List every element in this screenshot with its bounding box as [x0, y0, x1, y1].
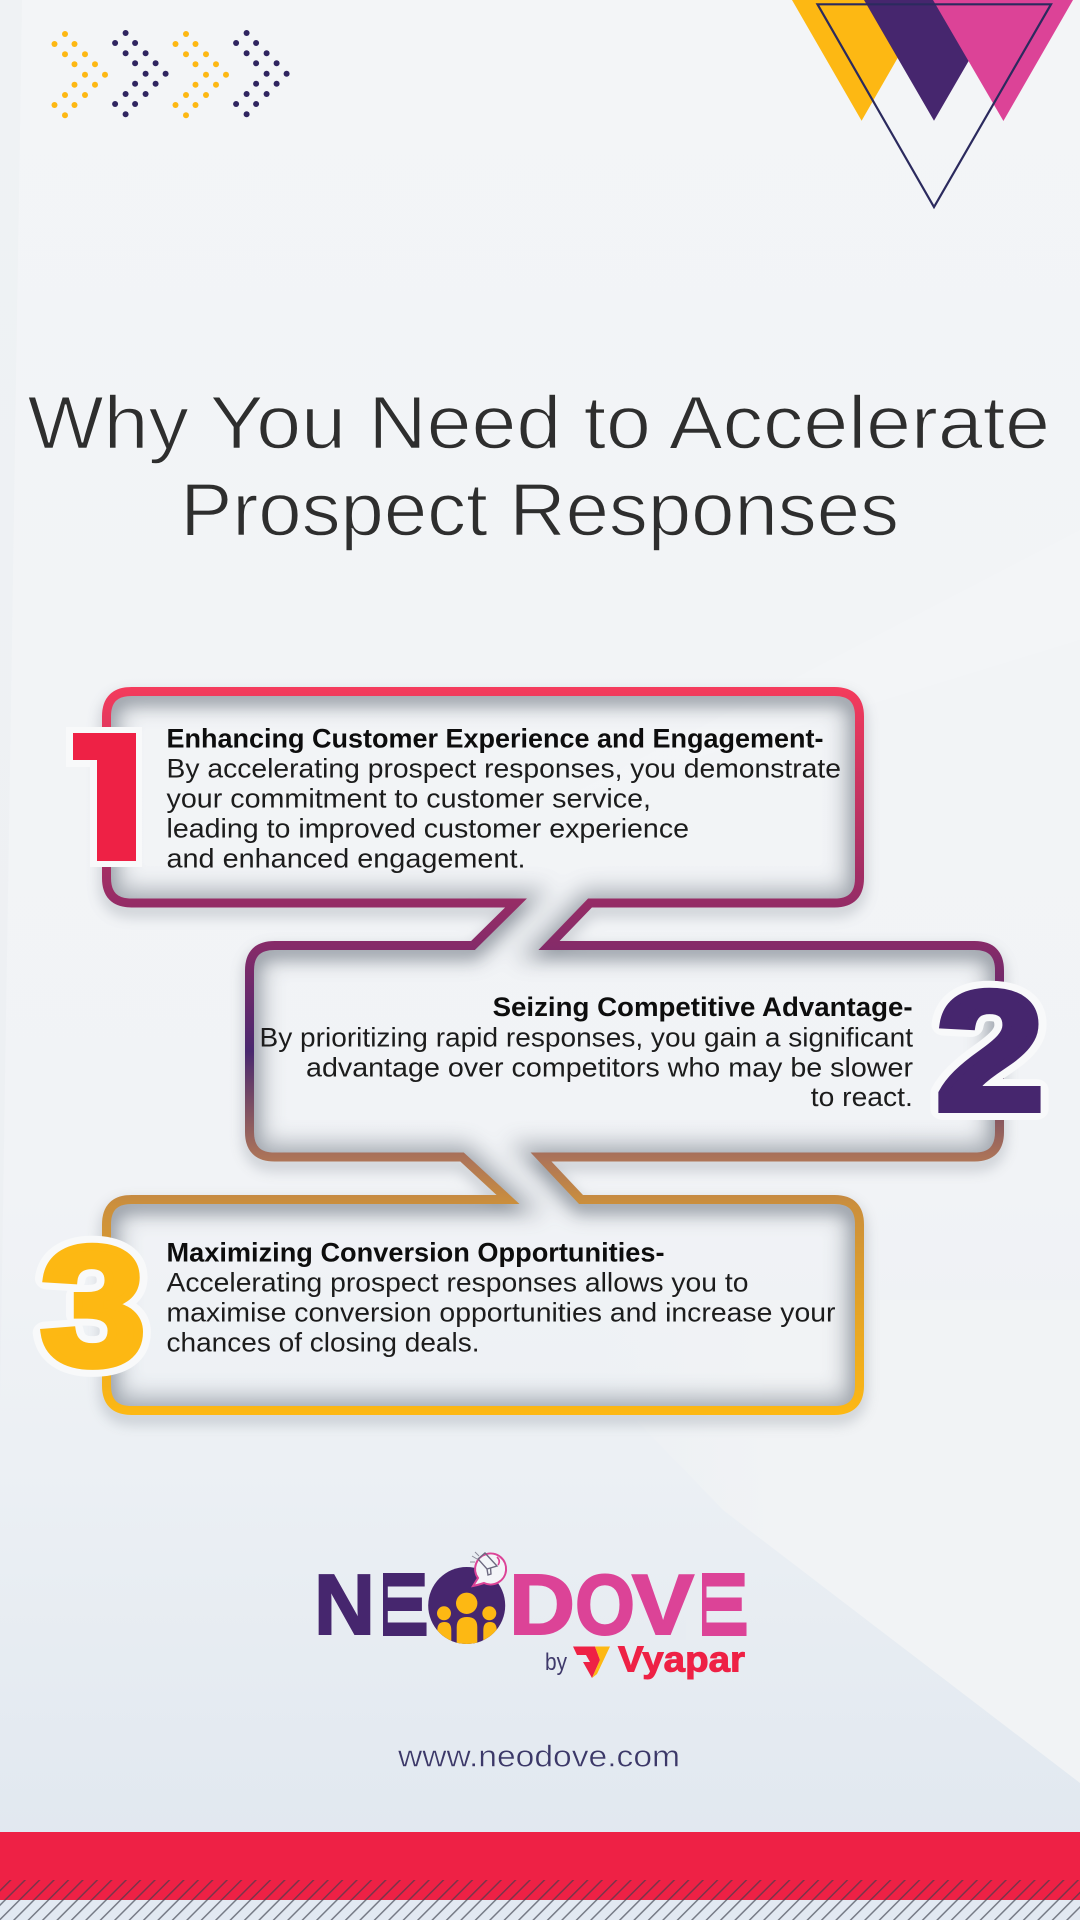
logo wordmark: V: [632, 1558, 694, 1653]
NeoDove logo: [314, 1552, 748, 1680]
number 3: 3: [41, 1212, 145, 1400]
panel 2 text: Seizing Competitive Advantage-: [493, 992, 913, 1022]
logo wordmark: N: [314, 1558, 375, 1653]
number 1: [73, 727, 142, 867]
panel 3 text: maximise conversion opportunities and increase your: [166, 1298, 836, 1328]
logo wordmark: D: [509, 1558, 575, 1653]
panel 1 text: and enhanced engagement.: [166, 844, 526, 874]
dotted chevron arrows: [52, 30, 290, 118]
panel 1 text: By accelerating prospect responses, you demonstrate: [166, 754, 841, 784]
panel 3 text: Maximizing Conversion Opportunities-: [166, 1238, 664, 1268]
number 1: 1: [55, 699, 155, 900]
footer band: [0, 1832, 1080, 1920]
title: Why You Need to Accelerate: [28, 380, 1050, 464]
panel 1 text: [166, 723, 841, 874]
panel 3 text: chances of closing deals.: [166, 1328, 480, 1358]
logo wordmark: [314, 1558, 748, 1653]
title: Prospect Responses: [180, 468, 899, 552]
number 2: 2: [936, 958, 1044, 1145]
panel 2 text: By prioritizing rapid responses, you gain a significant: [260, 1022, 914, 1052]
logo wordmark: E: [684, 1558, 748, 1653]
decorative triangles: [792, 0, 1073, 207]
logo wordmark: O: [575, 1558, 635, 1653]
logo wordmark: E: [366, 1558, 428, 1653]
panel 1 text: Enhancing Customer Experience and Engagement-: [166, 723, 824, 753]
number 1: 1: [55, 699, 155, 900]
title: [28, 380, 1050, 552]
panel 1 text: your commitment to customer service,: [166, 784, 651, 814]
number 2: 2: [936, 958, 1044, 1145]
icon: Vyapar mark: [573, 1646, 610, 1678]
panel 2 text: to react.: [811, 1082, 913, 1112]
icon: people circle: [428, 1567, 505, 1646]
panel 1 text: leading to improved customer experience: [166, 814, 689, 844]
panel 2 text: [260, 992, 914, 1112]
panel 3 text: Accelerating prospect responses allows you to: [166, 1268, 749, 1298]
number 3: 3: [41, 1212, 145, 1400]
panel 3 text: [166, 1238, 836, 1358]
connected speech-box frame: [106, 692, 1000, 1418]
icon: megaphone bubble: [470, 1552, 506, 1586]
by label: by: [545, 1649, 567, 1676]
website url: www.neodove.com: [397, 1739, 680, 1774]
Vyapar wordmark: Vyapar: [618, 1639, 745, 1680]
panel 2 text: advantage over competitors who may be slower: [306, 1052, 913, 1082]
